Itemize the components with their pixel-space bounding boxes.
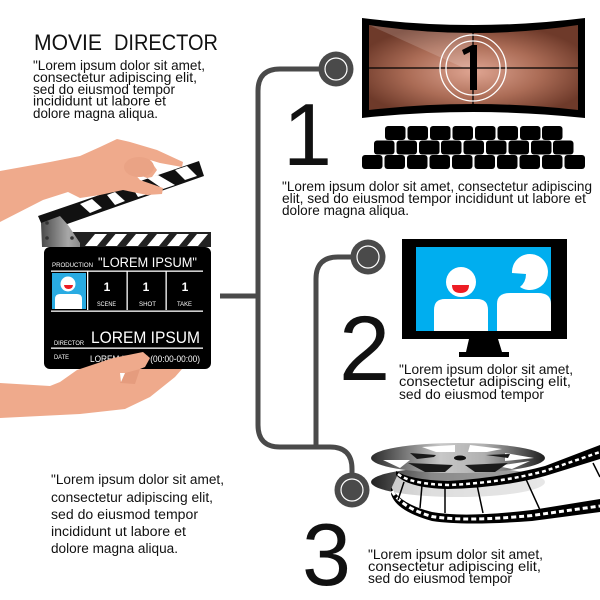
text block 3: "Lorem ipsum dolor sit amet, [368, 546, 543, 562]
intro text: consectetur adipiscing elit, [33, 69, 197, 85]
text block 2: "Lorem ipsum dolor sit amet, [399, 361, 573, 377]
connector lines [220, 69, 368, 490]
bottom left text block [51, 472, 224, 556]
node 2 [350, 240, 386, 274]
clapperboard: DATE [54, 354, 70, 361]
bottom hand [0, 352, 182, 418]
clapperboard: TAKE [177, 301, 193, 308]
icon: person avatar [52, 273, 86, 309]
node 1 [318, 52, 354, 86]
bottom left text block: dolore magna aliqua. [51, 541, 178, 556]
text block 1: elit, sed do eiusmod tempor incididunt ut labore et [282, 190, 586, 206]
title: MOVIE [34, 30, 102, 55]
clapperboard: SHOT [139, 301, 156, 308]
clapperboard: SCENE [97, 301, 117, 308]
upper film strip [396, 445, 600, 489]
title: DIRECTOR [114, 30, 218, 55]
title [34, 30, 218, 55]
clapperboard: 1 [182, 280, 189, 294]
text block 2: sed do eiusmod tempor [399, 386, 544, 402]
clapperboard [38, 161, 211, 369]
bottom left text block: consectetur adipiscing elit, [51, 490, 213, 505]
clapperboard: "LOREM IPSUM" [98, 255, 197, 270]
bottom left text block: incididunt ut labore et [51, 524, 186, 539]
text block 3: consectetur adipiscing elit, [368, 558, 541, 574]
text block 1 [282, 178, 592, 218]
clapperboard: LOREM IPSUM [91, 329, 200, 347]
intro text: "Lorem ipsum dolor sit amet, [33, 57, 205, 73]
intro text [33, 57, 205, 121]
text block 3: sed do eiusmod tempor [368, 570, 512, 586]
text block 1: dolore magna aliqua. [282, 202, 409, 218]
text block 2 [399, 361, 573, 402]
text block 1: "Lorem ipsum dolor sit amet, consectetur adipiscing [282, 178, 592, 194]
bottom left text block: "Lorem ipsum dolor sit amet, [51, 472, 224, 487]
clapperboard: 1 [143, 280, 150, 294]
clapperboard: DIRECTOR [54, 340, 84, 347]
text block 3 [368, 546, 543, 586]
intro text: incididunt ut labore et [33, 92, 166, 108]
node 3 [334, 472, 370, 508]
cinema screen [362, 18, 585, 118]
clapper arm [38, 161, 204, 232]
theatre seats [362, 126, 585, 169]
clapperboard: LOREM IPSUM (00:00-00:00) [90, 354, 200, 364]
clapperboard: 1 [104, 280, 111, 294]
number 2: 2 [339, 298, 390, 400]
icon: hinge [41, 216, 80, 247]
monitor [402, 239, 567, 357]
film reel [371, 443, 600, 524]
number 1: 1 [283, 85, 332, 184]
top hand [0, 139, 183, 222]
lower film strip [391, 487, 600, 524]
text block 2: consectetur adipiscing elit, [399, 373, 571, 389]
bottom left text block: sed do eiusmod tempor [51, 507, 199, 522]
intro text: sed do eiusmod tempor [33, 81, 175, 97]
clapperboard: PRODUCTION [52, 262, 93, 269]
intro text: dolore magna aliqua. [33, 105, 158, 121]
